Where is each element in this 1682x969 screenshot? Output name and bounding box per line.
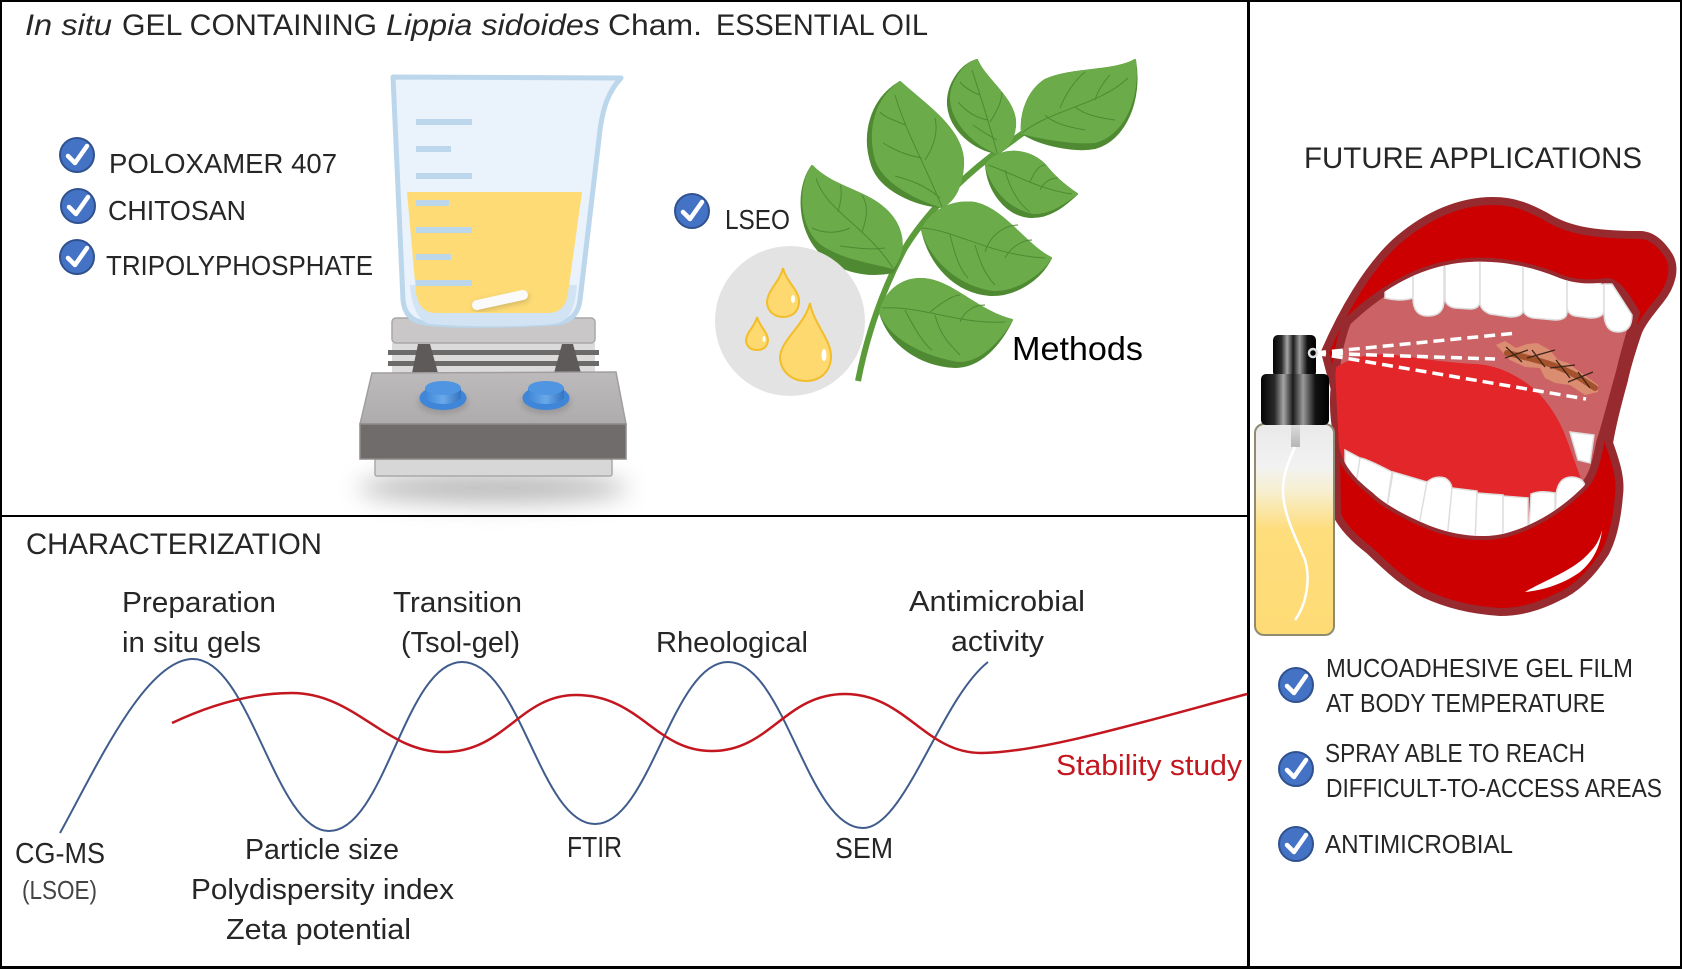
wave labels: activity — [951, 626, 1045, 658]
title: Lippia sidoides — [386, 9, 600, 42]
text: spray: SPRAY ABLE TO REACH — [1325, 738, 1585, 768]
label: tripolyphosphate: TRIPOLYPHOSPHATE — [106, 250, 373, 281]
upper teeth — [1385, 258, 1632, 332]
mouth interior — [1334, 262, 1636, 536]
wave labels: Zeta potential — [226, 914, 411, 946]
leaf: bottom — [880, 279, 1012, 367]
lips — [1325, 201, 1672, 612]
icon: check chitosan — [61, 189, 95, 223]
text: spray — [1325, 738, 1662, 803]
chart: red stability wave — [172, 693, 1247, 753]
panel: method — [25, 9, 1143, 503]
wave labels: SEM — [835, 833, 893, 865]
icon: stir bar — [477, 295, 523, 305]
title: ESSENTIAL OIL — [716, 9, 928, 42]
heading: characterization: CHARACTERIZATION — [26, 528, 322, 561]
application checklist — [1279, 653, 1662, 861]
icon: check LSEO — [675, 194, 709, 228]
label: methods: Methods — [1012, 330, 1143, 367]
heading: future applications: FUTURE APPLICATIONS — [1304, 142, 1642, 175]
label: poloxamer 407: POLOXAMER 407 — [109, 148, 337, 179]
wave labels: (Tsol-gel) — [401, 627, 520, 659]
ingredient checklist — [60, 138, 373, 281]
leaf: middle — [922, 203, 1051, 295]
icon: mouth — [1315, 201, 1672, 612]
title: Cham. — [608, 9, 702, 42]
text: antimicrobial: ANTIMICROBIAL — [1325, 829, 1513, 859]
icon: spray bottle — [1255, 335, 1334, 635]
title: GEL CONTAINING — [122, 9, 377, 42]
icon: check poloxamer — [60, 138, 94, 172]
icon: magnetic stirrer — [358, 318, 628, 503]
title — [25, 9, 928, 42]
icon: beaker with gel — [393, 77, 621, 326]
wave labels: CG-MS — [15, 838, 105, 870]
wave labels: FTIR — [567, 832, 622, 864]
leaf: top middle — [868, 82, 963, 207]
icon: check spray — [1279, 752, 1313, 786]
icon: check antimicrobial — [1279, 827, 1313, 861]
text: mucoadhesive: AT BODY TEMPERATURE — [1326, 688, 1605, 718]
panel: characterization — [15, 528, 1247, 946]
leaf: right middle — [986, 152, 1077, 217]
tongue — [1335, 354, 1585, 530]
icon: oil drops — [715, 246, 865, 396]
wave labels: Rheological — [656, 627, 808, 659]
text: mucoadhesive — [1326, 653, 1633, 718]
leaf: top right — [1022, 60, 1137, 149]
icon: check tripolyphosphate — [60, 240, 94, 274]
label: chitosan: CHITOSAN — [108, 195, 246, 226]
wave labels: Particle size — [245, 834, 399, 866]
spray lines — [1315, 333, 1586, 399]
wave labels: (LSOE) — [22, 875, 97, 905]
wave labels: Stability study — [1056, 750, 1243, 782]
leaf: top small — [948, 60, 1015, 153]
lower teeth — [1345, 432, 1594, 545]
lip gloss — [1525, 530, 1602, 592]
text: mucoadhesive: MUCOADHESIVE GEL FILM — [1326, 653, 1633, 683]
wound with stitches — [1496, 341, 1598, 395]
wave labels: Transition — [393, 587, 522, 619]
wave labels: Antimicrobial — [909, 586, 1085, 618]
wave labels: Preparation — [122, 587, 276, 619]
wave labels: in situ gels — [122, 627, 261, 659]
wave labels: Polydispersity index — [191, 874, 455, 906]
icon: check mucoadhesive — [1279, 668, 1313, 702]
chart: blue wave — [60, 659, 988, 833]
icon: plant branch — [802, 60, 1137, 381]
panel: future applications — [1255, 142, 1672, 861]
label: LSEO: LSEO — [725, 204, 790, 235]
leaf: left big — [802, 166, 902, 274]
title: In situ — [25, 9, 112, 42]
wave labels — [15, 586, 1243, 946]
